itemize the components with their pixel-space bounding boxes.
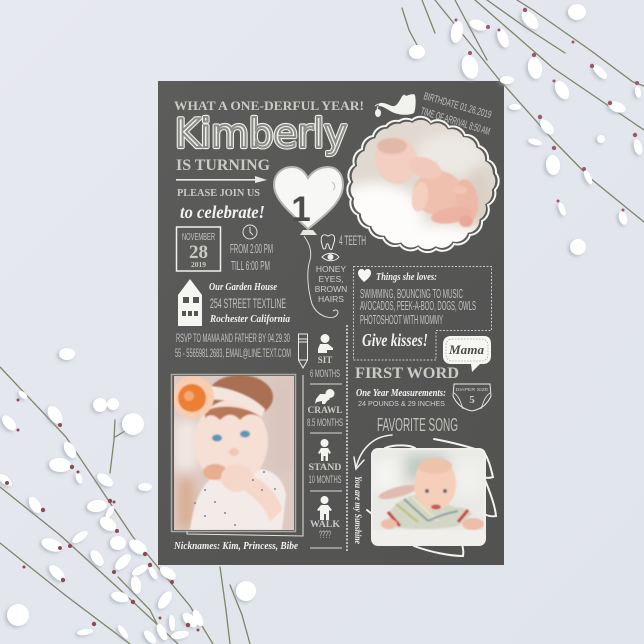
text: address: Rochester California [209, 314, 290, 325]
icon: diaper size 5 [453, 384, 491, 411]
dotted vertical divider [346, 325, 348, 552]
milestone: sit: 6 MONTHS [310, 368, 340, 380]
divider [310, 548, 342, 549]
text: to celebrate: to celebrate! [180, 202, 265, 222]
milestone: crawl: 8.5 MONTHS [307, 417, 343, 429]
icon: house [178, 279, 202, 326]
panel: chalkboard invitation card: RSVP TO MAMA AND FATHER BY 04.29.30 [176, 331, 290, 345]
list of loves [360, 287, 476, 327]
balloon string [304, 236, 338, 318]
heading: favorite song: FAVORITE SONG [377, 414, 458, 435]
speech bubble: Mama [443, 336, 491, 372]
heading: first word: FIRST WORD [355, 365, 459, 382]
heart balloon with number 1 [274, 167, 343, 235]
icon: clock [243, 225, 257, 239]
text: party time [230, 242, 273, 273]
title: Kimberly: Kimberly [175, 112, 347, 157]
milestone: walk: ???? [319, 529, 331, 541]
divider [310, 384, 342, 385]
text: address: Our Garden House [209, 282, 277, 293]
flower stems and blossoms, upper right [402, 0, 644, 255]
icon: tooth [321, 235, 335, 249]
date box: 2019 [191, 260, 206, 269]
text: give kisses: Give kisses! [362, 330, 428, 350]
arrow [176, 176, 267, 183]
panel: chalkboard invitation card: FROM 2:00 PM [230, 242, 273, 256]
date box: 28 [189, 242, 208, 263]
list of loves: SWIMMING, BOUNCING TO MUSIC [360, 287, 463, 301]
text: please join us: PLEASE JOIN US [177, 188, 260, 199]
text: birth details [419, 90, 493, 138]
text: one year measurements: 24 POUNDS & 29 INCHES [358, 399, 445, 408]
text: birth details: TIME OF ARRIVAL 8:50 AM [419, 105, 491, 138]
heading: what a one-derful year: WHAT A ONE-DERFUL YEAR! [174, 98, 364, 113]
icon: diaper size 5: DIAPER SIZE [456, 387, 488, 392]
photo: baby girl with flower headband [172, 374, 296, 532]
milestone: walk [310, 496, 340, 541]
text: honey eyes brown hairs: HAIRS [318, 294, 344, 304]
text: honey eyes brown hairs [315, 264, 347, 304]
flower stems and blossoms, lower left [0, 348, 256, 644]
icon: eye [322, 253, 339, 261]
scalloped photo frame: newborn [346, 116, 500, 254]
milestone: sit [310, 334, 340, 380]
text: honey eyes brown hairs: HONEY [316, 264, 346, 274]
list of loves: PHOTOSHOOT WITH MOMMY [360, 313, 443, 327]
icon: stork [375, 94, 416, 117]
panel: things she loves: AVOCADOS, PEEK-A-BOO, DOGS, OWLS [360, 299, 476, 313]
icon: diaper size 5: 5 [469, 394, 475, 406]
scribble around photo [367, 439, 496, 556]
milestone: stand: STAND [308, 462, 342, 472]
text: address: 254 STREET TEXTLINE [210, 295, 286, 311]
icon: heart [358, 269, 371, 282]
text: address [209, 282, 290, 325]
divider [310, 432, 342, 434]
photo: baby lying on tummy [371, 448, 486, 546]
milestone: stand: 10 MONTHS [308, 474, 342, 486]
date box: NOVEMBER [182, 231, 215, 243]
text: party time: TILL 6:00 PM [231, 259, 270, 273]
milestone: sit: SIT [318, 355, 332, 365]
milestone: stand [308, 439, 342, 486]
heading: is turning: IS TURNING [176, 157, 270, 174]
text: you are my sunshine: You are my Sunshine [352, 476, 362, 545]
milestone: crawl: CRAWL [308, 405, 342, 415]
heart balloon with number 1: 1 [291, 190, 311, 229]
text: rsvp [175, 331, 291, 360]
icon: pencil [298, 334, 308, 368]
title: Kimberly: Kimberly [175, 112, 347, 157]
text: birth details: BIRTHDATE 01.26.2019 [422, 90, 493, 121]
date box [176, 227, 220, 271]
panel: chalkboard invitation card: 4 TEETH [339, 233, 366, 248]
arrow: curved [354, 435, 392, 469]
hand-drawn line around photo [187, 375, 303, 536]
panel: chalkboard invitation card: 55 - 5565981.2683, EMAIL@LINE.TEXT.COM [175, 346, 291, 360]
text: one year measurements [356, 388, 446, 408]
heading: things she loves: Things she loves: [376, 271, 437, 283]
panel: things she loves [354, 266, 492, 360]
text: honey eyes brown hairs: BROWN [315, 284, 347, 294]
panel: chalkboard invitation card [158, 81, 504, 565]
divider [310, 490, 342, 492]
text: nicknames: Nicknames: Kim, Princess, Bibe [173, 540, 298, 552]
text: one year measurements: One Year Measurements: [356, 388, 446, 399]
milestone: crawl [307, 389, 343, 429]
speech bubble: Mama: Mama [448, 342, 485, 357]
milestone: walk: WALK [310, 519, 340, 529]
text: honey eyes brown hairs: EYES, [318, 274, 344, 284]
